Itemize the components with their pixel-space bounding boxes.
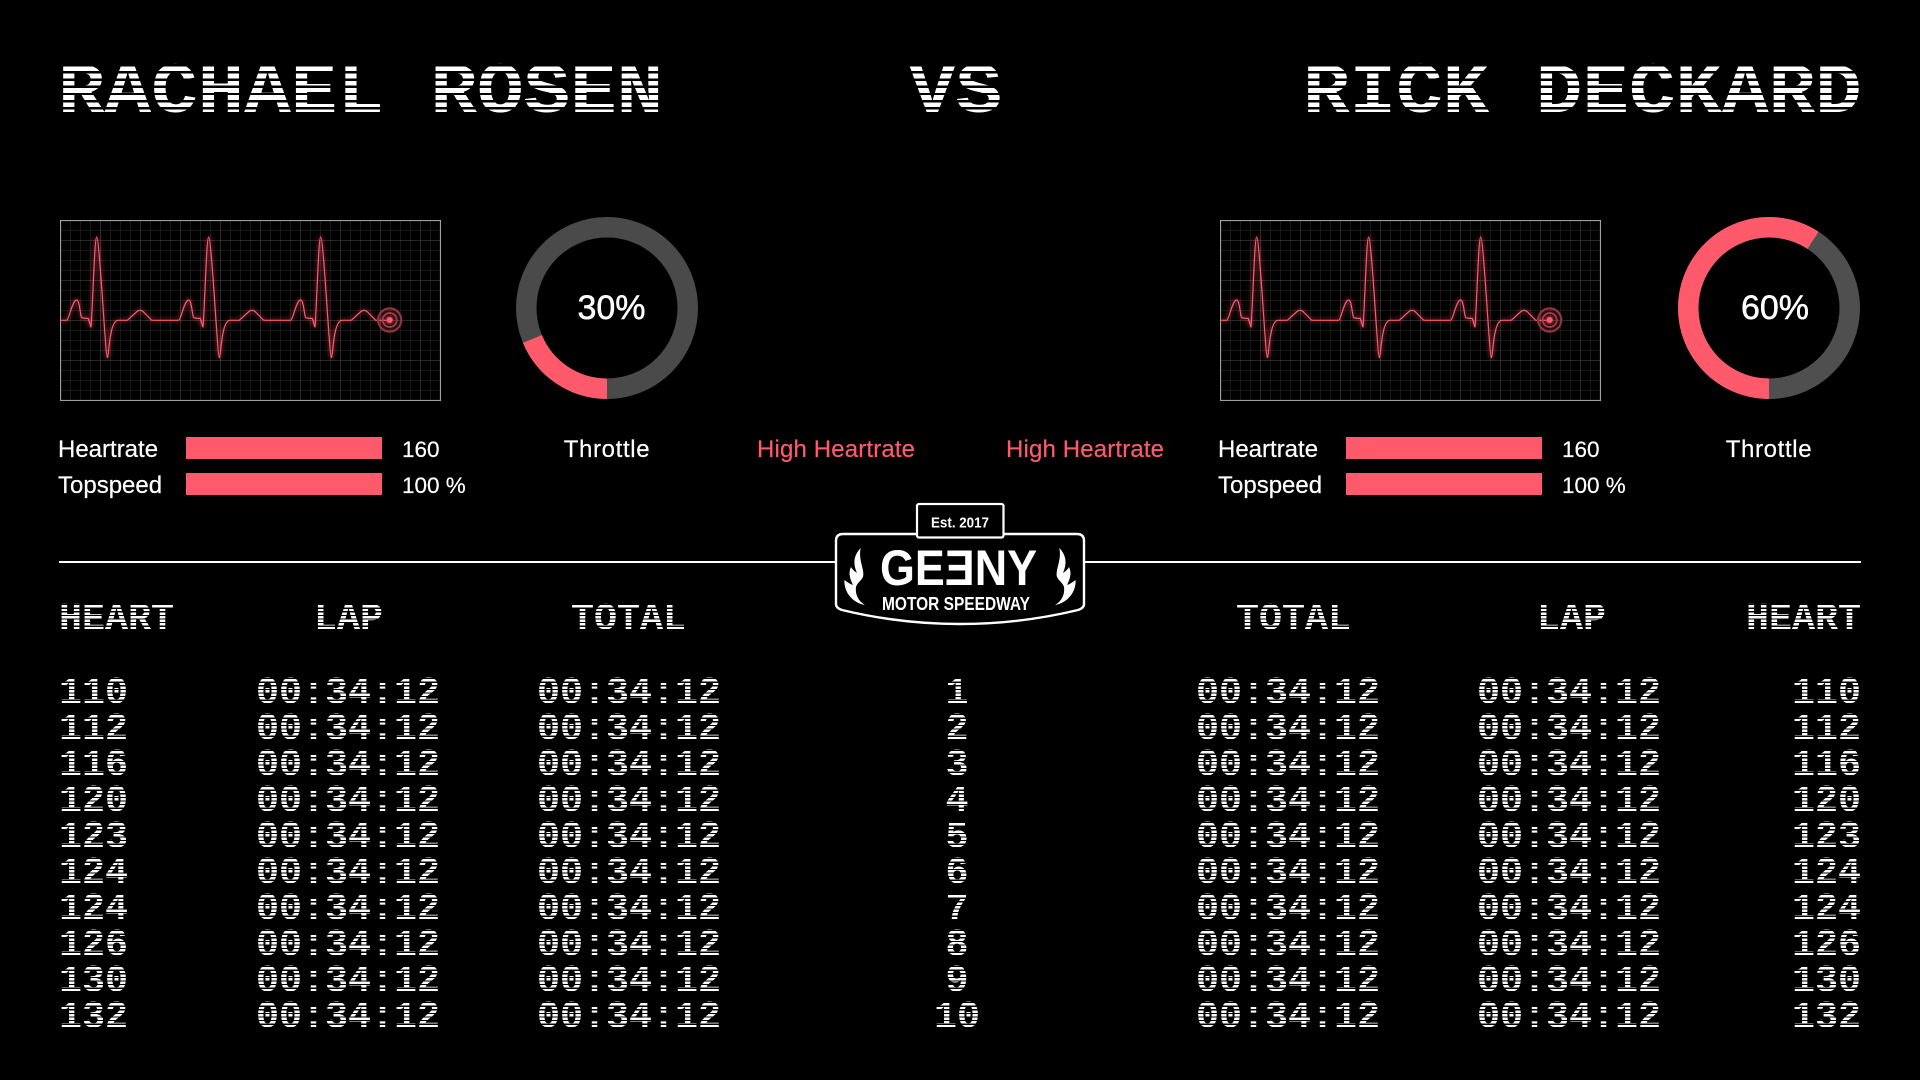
logo: Geeny Motor Speedway with divider line: MOTOR SPEEDWAY <box>882 594 1030 614</box>
logo: Geeny Motor Speedway with divider line: GEƎNY <box>880 540 1037 596</box>
right throttle value: 60% <box>1741 289 1809 327</box>
chart: right heartbeat monitor <box>1220 220 1601 401</box>
table header: left total: TOTAL <box>571 597 686 641</box>
bar: right heartrate <box>1346 437 1542 459</box>
label: right heartrate: Heartrate <box>1218 436 1318 463</box>
table column: right heart values: 110 112 116 120 123 124 124 126 130 132 <box>1792 671 1861 1039</box>
label: left topspeed: Topspeed <box>58 472 162 499</box>
logo: Geeny Motor Speedway with divider line: Est. 2017 <box>931 515 989 532</box>
table column: left heart values: 110 112 116 120 123 124 124 126 130 132 <box>59 671 128 1039</box>
value: left topspeed: 100 % <box>402 473 466 498</box>
left throttle value: 30% <box>577 289 646 327</box>
title: Rick Deckard: RICK DECKARD <box>1303 53 1862 134</box>
table column: lap numbers: 1 2 3 4 5 6 7 8 9 10 <box>934 671 980 1039</box>
logo: Geeny Motor Speedway with divider line <box>59 502 1861 626</box>
value: left heartrate: 160 <box>402 437 440 462</box>
label: left throttle: Throttle <box>564 436 650 463</box>
alert: right high heartrate: High Heartrate <box>1006 436 1164 463</box>
table header: left heart: HEART <box>59 597 174 641</box>
title: VS: VS <box>909 53 1002 134</box>
table header: left lap: LAP <box>314 597 383 641</box>
label: right topspeed: Topspeed <box>1218 472 1322 499</box>
bar: left heartrate <box>186 437 382 459</box>
bar: right topspeed <box>1346 473 1542 495</box>
value: right topspeed: 100 % <box>1562 473 1626 498</box>
chart: left heartbeat monitor <box>60 220 441 401</box>
chart: right throttle donut <box>1678 217 1860 399</box>
title: Rachael Rosen: RACHAEL ROSEN <box>58 53 663 134</box>
alert: left high heartrate: High Heartrate <box>757 436 915 463</box>
table header: right heart: HEART <box>1746 597 1861 641</box>
table header: right total: TOTAL <box>1236 597 1351 641</box>
value: right heartrate: 160 <box>1562 437 1600 462</box>
chart: left throttle donut <box>516 217 698 399</box>
table column: right lap times: 00:34:12 00:34:12 00:34:12 00:34:12 00:34:12 00:34:12 00:34:12 00:34:12 00:34:12 00:34:12 <box>1477 671 1661 1039</box>
table column: left lap times: 00:34:12 00:34:12 00:34:12 00:34:12 00:34:12 00:34:12 00:34:12 00:34:12 00:34:12 00:34:12 <box>256 671 440 1039</box>
table column: left total times: 00:34:12 00:34:12 00:34:12 00:34:12 00:34:12 00:34:12 00:34:12 00:34:12 00:34:12 00:34:12 <box>537 671 721 1039</box>
table header: right lap: LAP <box>1537 597 1606 641</box>
label: left heartrate: Heartrate <box>58 436 158 463</box>
bar: left topspeed <box>186 473 382 495</box>
table column: right total times: 00:34:12 00:34:12 00:34:12 00:34:12 00:34:12 00:34:12 00:34:12 00:34:12 00:34:12 00:34:12 <box>1196 671 1380 1039</box>
label: right throttle: Throttle <box>1726 436 1812 463</box>
